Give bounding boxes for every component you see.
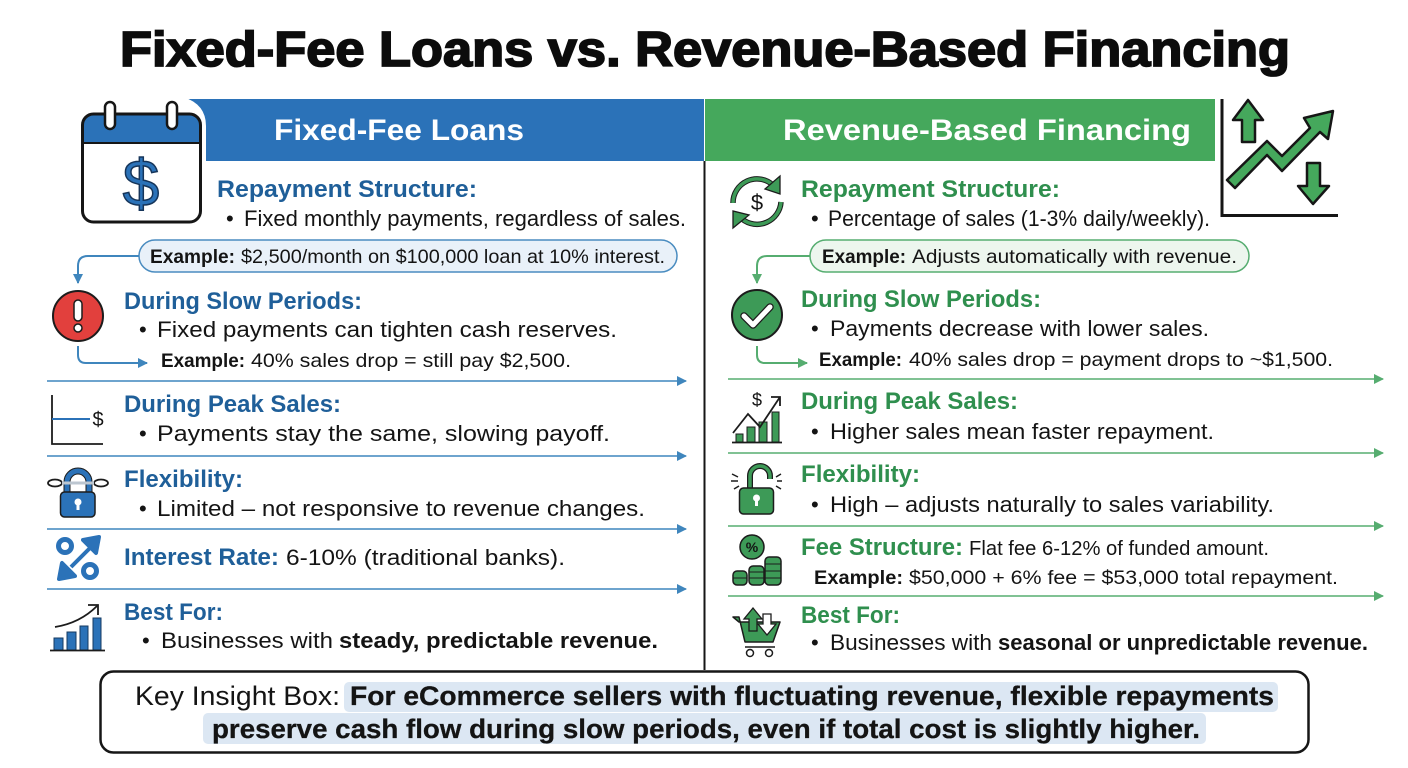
section: during slow periods: • — [811, 316, 819, 341]
section: flexibility: Limited – not responsive to revenue changes. — [157, 496, 645, 521]
section: flexibility: • — [139, 496, 147, 521]
section: fee structure: $50,000 + 6% fee = $53,000 total repayment. — [909, 567, 1338, 589]
icon: flat payment chart: $ — [92, 409, 104, 431]
section: during peak sales — [124, 391, 610, 446]
section: during peak sales: During Peak Sales: — [124, 391, 341, 418]
icon: check mark — [732, 290, 782, 340]
icon: rising bars with dollar — [732, 390, 782, 442]
section: during peak sales: During Peak Sales: — [801, 388, 1018, 415]
section: flexibility — [801, 461, 1274, 517]
text: slow periods example: 40% sales drop = payment drops to ~$1,500. — [909, 349, 1333, 371]
section: best for: Businesses with — [830, 630, 992, 655]
section: during slow periods: During Slow Periods: — [801, 286, 1041, 313]
section: during peak sales — [801, 388, 1214, 444]
arrow: slow periods to example — [78, 346, 147, 363]
arrow: example to slow periods — [757, 256, 810, 283]
section: best for: seasonal or unpredictable revenue. — [998, 630, 1368, 655]
section: best for: Best For: — [124, 599, 223, 626]
icon: calendar with dollar sign — [72, 97, 206, 230]
callout: example pill: $2,500/month on $100,000 loan at 10% interest. — [241, 246, 665, 268]
section: fee structure: Flat fee 6-12% of funded amount. — [969, 537, 1269, 560]
section: interest rate — [124, 544, 565, 571]
text: slow periods example: 40% sales drop = still pay $2,500. — [251, 350, 571, 372]
section: best for — [801, 602, 1368, 655]
section: repayment structure — [801, 176, 1210, 231]
section: fee structure: Example: — [814, 567, 903, 589]
arrow: example to slow periods — [78, 256, 139, 283]
callout: key insight box: Key Insight Box: — [135, 681, 340, 711]
section: repayment structure: • — [811, 206, 819, 231]
section: best for — [124, 599, 658, 653]
icon: circular dollar arrows — [733, 176, 781, 228]
icon: percent with double arrow — [58, 537, 99, 579]
section: during peak sales: • — [811, 419, 819, 444]
section: during slow periods — [801, 286, 1209, 341]
callout: key insight box — [100, 672, 1308, 752]
section: best for: • — [142, 628, 150, 653]
section: fee structure: Fee Structure: — [801, 534, 963, 561]
panel: revenue-based header — [705, 99, 1215, 161]
heading: fixed-fee loans: Fixed-Fee Loans — [274, 114, 524, 147]
section: interest rate: Interest Rate: — [124, 544, 279, 571]
panel: revenue-based column — [728, 176, 1383, 656]
icon: coin stacks with percent — [733, 535, 781, 585]
section: during slow periods: Fixed payments can tighten cash reserves. — [157, 317, 617, 342]
section: flexibility: Flexibility: — [801, 461, 920, 488]
icon: rising bars — [50, 605, 105, 650]
section: repayment structure: Percentage of sales (1-3% daily/weekly). — [828, 206, 1210, 231]
icon: calendar with dollar sign: $ — [123, 146, 159, 220]
icon: open padlock — [731, 466, 782, 514]
callout: example pill — [139, 240, 677, 272]
callout: example pill: Adjusts automatically with revenue. — [912, 246, 1237, 268]
icon: circular dollar arrows: $ — [751, 190, 763, 215]
section: best for: steady, predictable revenue. — [339, 628, 658, 653]
section: repayment structure: Repayment Structure: — [217, 176, 477, 203]
icon: rising bars with dollar: $ — [752, 390, 762, 410]
heading: revenue-based financing: Revenue-Based Financing — [783, 114, 1191, 147]
text: slow periods example: Example: — [161, 350, 245, 372]
section: repayment structure: • — [226, 206, 234, 231]
section: during peak sales: • — [139, 421, 147, 446]
title: Fixed-Fee Loans vs. Revenue-Based Financing — [120, 23, 1290, 77]
section: flexibility: • — [811, 492, 819, 517]
callout: example pill — [810, 240, 1249, 272]
divider between columns — [704, 161, 706, 670]
callout: example pill: Example: — [822, 246, 906, 268]
icon: shopping cart with arrows — [733, 608, 780, 656]
section: during slow periods — [124, 288, 617, 342]
callout: key insight box: For eCommerce sellers with fluctuating revenue, flexible repayments — [350, 681, 1274, 711]
section: repayment structure: Repayment Structure: — [801, 176, 1060, 203]
section: during slow periods: Payments decrease with lower sales. — [830, 316, 1209, 341]
icon: flat payment chart — [52, 395, 104, 444]
section: best for: Best For: — [801, 602, 900, 629]
icon: growth chart with up and down arrows — [1222, 99, 1338, 216]
section: during slow periods: • — [139, 317, 147, 342]
panel: fixed-fee column — [47, 176, 686, 653]
section: flexibility — [124, 466, 645, 521]
section: flexibility: High – adjusts naturally to sales variability. — [830, 492, 1274, 517]
callout: key insight box: preserve cash flow during slow periods, even if total cost is slightly higher. — [212, 714, 1200, 744]
section: interest rate: 6-10% (traditional banks). — [286, 545, 565, 570]
section: best for: Businesses with — [161, 628, 333, 653]
arrow: slow periods to example — [757, 346, 807, 363]
section: during peak sales: Higher sales mean faster repayment. — [830, 419, 1214, 444]
panel: fixed-fee header — [183, 99, 704, 161]
section: fee structure — [801, 534, 1338, 589]
section: during peak sales: Payments stay the same, slowing payoff. — [157, 421, 610, 446]
section: repayment structure — [217, 176, 686, 231]
icon: warning — [53, 291, 103, 341]
section: best for: • — [811, 630, 819, 655]
section: flexibility: Flexibility: — [124, 466, 243, 493]
section: repayment structure: Fixed monthly payments, regardless of sales. — [244, 206, 686, 231]
text: slow periods example: Example: — [819, 349, 902, 371]
callout: example pill: Example: — [150, 246, 235, 268]
icon: coin stacks with percent: % — [746, 539, 759, 555]
icon: chained padlock — [48, 471, 108, 517]
section: during slow periods: During Slow Periods: — [124, 288, 362, 315]
